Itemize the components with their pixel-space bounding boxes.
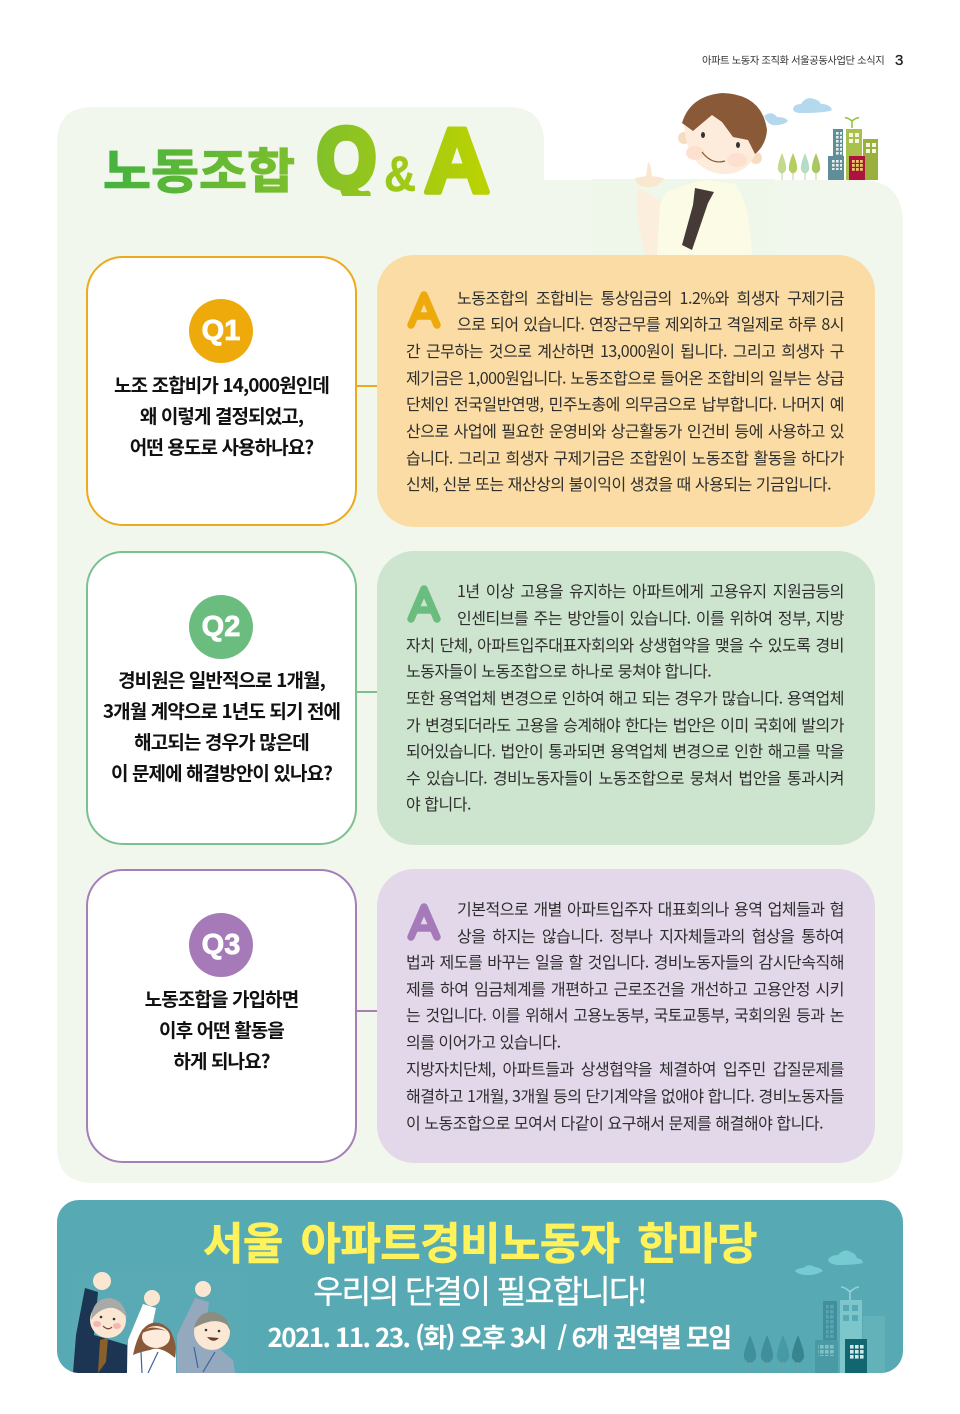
Q&A row 3 xyxy=(86,869,875,1163)
question 1 text: 어떤 용도로 사용하나요? xyxy=(130,433,313,460)
clouds xyxy=(764,98,832,125)
question 1 text: 노조 조합비가 14,000원인데 xyxy=(114,371,329,398)
worker in white shirt xyxy=(127,1290,176,1373)
question 2 text: 이 문제에 해결방안이 있나요? xyxy=(111,759,332,786)
title: 노동조합 Q&A xyxy=(103,115,490,205)
title korean word: 노동조합 xyxy=(103,132,295,202)
answer 3 text: 기본적으로 개별 아파트입주자 대표회의나 용역 업체들과 협 xyxy=(457,896,844,920)
answer 2 text: 야 합니다. xyxy=(406,791,471,815)
connector 3 xyxy=(357,1010,377,1012)
question 2 text: 경비원은 일반적으로 1개월, xyxy=(118,666,325,693)
banner subtitle: 우리의 단결이 필요합니다! xyxy=(313,1266,646,1313)
answer 2 text xyxy=(406,578,844,815)
clouds xyxy=(795,1251,863,1275)
worker in grey shirt xyxy=(177,1281,235,1373)
question 2 text: 3개월 계약으로 1년도 되기 전에 xyxy=(103,697,340,724)
answer 2 letter A xyxy=(407,585,441,623)
answer 2 text: 인센티브를 주는 방안들이 있습니다. 이를 위하여 정부, 지방 xyxy=(457,605,844,629)
answer panel 3 xyxy=(377,869,875,1163)
connector 2 xyxy=(357,691,377,693)
question 3 text xyxy=(145,985,298,1074)
question card 3 xyxy=(86,869,357,1163)
Q3 badge xyxy=(189,913,253,977)
answer 3 text: 법과 제도를 바꾸는 일을 할 것입니다. 경비노동자들의 감시단속직해 xyxy=(406,949,844,973)
title letters Q and A xyxy=(317,124,490,196)
answer 3 text: 이 노동조합으로 모여서 다같이 요구해서 문제를 해결해야 합니다. xyxy=(406,1110,823,1134)
illustration: three workers raising fists xyxy=(71,1272,235,1373)
answer 1 text: 단체인 전국일반연맹, 민주노총에 의무금으로 납부합니다. 나머지 예 xyxy=(406,391,844,415)
trees xyxy=(744,1335,804,1373)
answer 1 text: 습니다. 그리고 희생자 구제기금은 조합원이 노동조합 활동을 하다가 xyxy=(406,445,844,469)
answer 1 text: 신체, 신분 또는 재산상의 불이익이 생겼을 때 사용되는 기금입니다. xyxy=(406,471,831,495)
Q1 badge: Q1 xyxy=(202,315,240,347)
answer 1 text: 제기금은 1,000원입니다. 노동조합으로 들어온 조합비의 일부는 상급 xyxy=(406,365,844,389)
answer 1 text xyxy=(406,285,844,495)
Q2 badge: Q2 xyxy=(202,611,240,643)
question 1 text xyxy=(114,371,329,460)
publication name: 아파트 노동자 조직화 서울공동사업단 소식지 xyxy=(702,52,884,67)
illustration: clouds, trees and city in teal xyxy=(744,1250,885,1373)
banner title: 서울 아파트경비노동자 한마당 xyxy=(203,1208,757,1272)
Q2 badge xyxy=(189,595,253,659)
answer 3 text: 상을 하지는 않습니다. 정부나 지자체들과의 협상을 통하여 xyxy=(457,923,844,947)
answer 2 text: 되어있습니다. 법안이 통과되면 용역업체 변경으로 인한 해고를 막을 xyxy=(406,738,844,762)
answer 3 text: 지방자치단체, 아파트들과 상생협약을 체결하여 입주민 갑질문제를 xyxy=(406,1056,844,1080)
answer 2 text: 자치 단체, 아파트입주대표자회의와 상생협약을 맺을 수 있도록 경비 xyxy=(406,632,844,656)
buildings xyxy=(815,1287,885,1373)
Q1 badge xyxy=(189,299,253,363)
Q&A row 1 xyxy=(86,255,875,527)
answer 2 text: 또한 용역업체 변경으로 인하여 해고 되는 경우가 많습니다. 용역업체 xyxy=(406,685,844,709)
question 1 text: 왜 이렇게 결정되었고, xyxy=(140,402,303,429)
answer 1 text: 산으로 사업에 필요한 운영비와 상근활동가 인건비 등에 사용하고 있 xyxy=(406,418,844,442)
trees xyxy=(778,153,820,180)
buildings xyxy=(828,118,878,180)
answer 2 text: 가 변경되더라도 고용을 승계해야 한다는 법안은 이미 국회에 발의가 xyxy=(406,712,844,736)
answer 3 text: 는 것입니다. 이를 위해서 고용노동부, 국토교통부, 국회의원 등과 논 xyxy=(406,1002,844,1026)
answer panel 2 xyxy=(377,551,875,845)
header: publication line and page number xyxy=(702,52,903,69)
worker in suit xyxy=(73,1272,127,1373)
illustration: man in shirt and tie pointing up xyxy=(592,93,775,255)
answer 2 text: 1년 이상 고용을 유지하는 아파트에게 고용유지 지원금등의 xyxy=(457,578,844,602)
answer 1 text: 으로 되어 있습니다. 연장근무를 제외하고 격일제로 하루 8시 xyxy=(457,311,844,335)
Q3 badge: Q3 xyxy=(202,929,240,961)
answer 3 text: 제를 하여 임금체계를 개편하고 근로조건을 개선하고 고용안정 시키 xyxy=(406,976,844,1000)
question 2 text: 해고되는 경우가 많은데 xyxy=(134,728,309,755)
answer 1 text: 노동조합의 조합비는 통상임금의 1.2%와 희생자 구제기금 xyxy=(457,285,844,309)
panel: light green background with title tab xyxy=(57,107,903,1183)
question 3 text: 하게 되나요? xyxy=(173,1047,270,1074)
Q&A row 2 xyxy=(86,551,875,845)
title letters Q and A: & xyxy=(384,146,416,202)
question 3 text: 노동조합을 가입하면 xyxy=(145,985,298,1012)
answer 3 text xyxy=(406,896,844,1134)
answer 3 letter A xyxy=(407,903,441,941)
answer 3 text: 의를 이어가고 있습니다. xyxy=(406,1029,561,1053)
connector 1 xyxy=(357,385,377,387)
question card 2 xyxy=(86,551,357,845)
banner: Seoul apartment security workers rally xyxy=(57,1200,903,1373)
answer panel 1 xyxy=(377,255,875,527)
question 3 text: 이후 어떤 활동을 xyxy=(159,1016,284,1043)
answer 1 text: 간 근무하는 것으로 계산하면 13,000원이 됩니다. 그리고 희생자 구 xyxy=(406,338,844,362)
answer 2 text: 노동자들이 노동조합으로 하나로 뭉쳐야 합니다. xyxy=(406,658,711,682)
illustration: clouds, trees and city xyxy=(764,98,878,180)
answer 1 letter A xyxy=(407,291,441,329)
question 2 text xyxy=(103,666,340,786)
banner date line: 2021. 11. 23. (화) 오후 3시 / 6개 권역별 모임 xyxy=(267,1318,731,1355)
page number: 3 xyxy=(895,52,903,69)
answer 3 text: 해결하고 1개월, 3개월 등의 단기계약을 없애야 합니다. 경비노동자들 xyxy=(406,1083,844,1107)
question card 1 xyxy=(86,256,357,526)
answer 2 text: 수 있습니다. 경비노동자들이 노동조합으로 뭉쳐서 법안을 통과시켜 xyxy=(406,765,844,789)
